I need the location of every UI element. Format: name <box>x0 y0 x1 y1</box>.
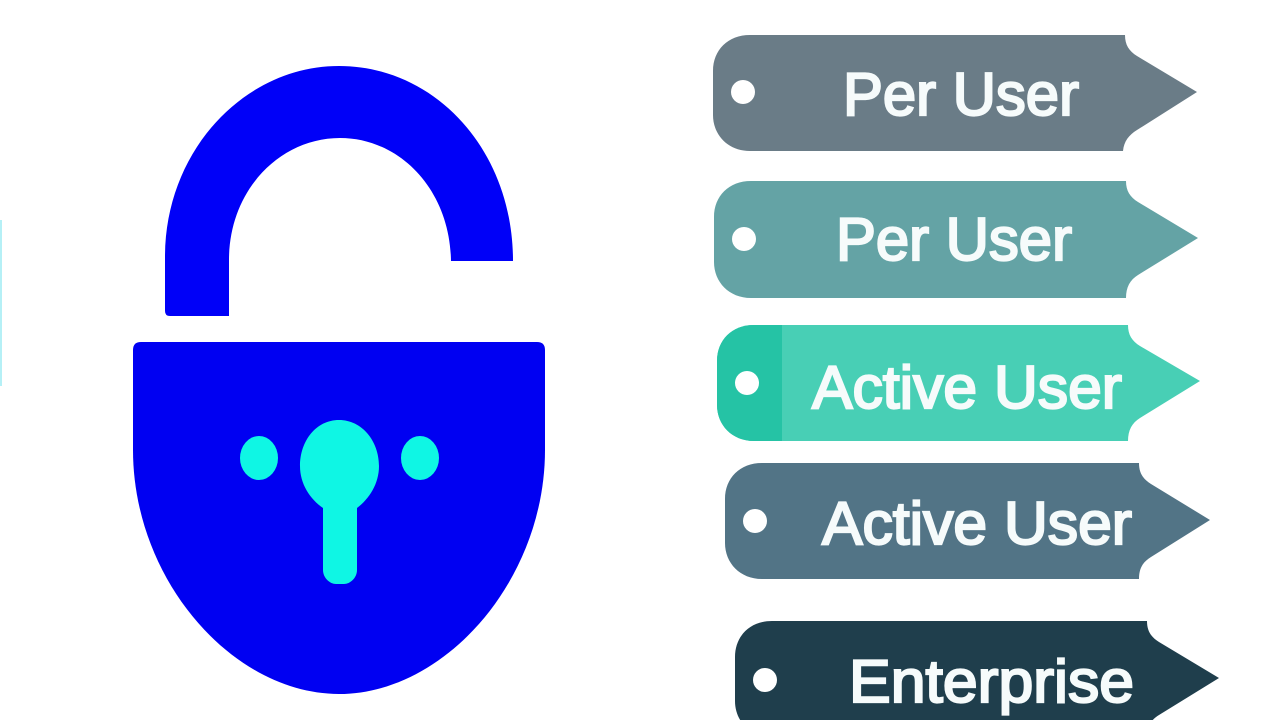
keyhole <box>300 420 379 584</box>
tag: Enterprise (dark): Enterprise <box>849 648 1134 715</box>
padlock body <box>133 342 545 694</box>
padlock shackle <box>165 66 513 316</box>
right dot <box>401 436 439 480</box>
tag: Per User (grey) <box>713 35 1197 151</box>
tag: Active User (slate): Active User <box>822 490 1132 557</box>
tag: Per User (teal grey) <box>714 181 1198 298</box>
tag: Active User (green teal): Active User <box>812 354 1122 421</box>
left dot <box>240 436 278 480</box>
tag: Per User (teal grey): Per User <box>836 206 1072 273</box>
tag: Enterprise (dark) <box>735 621 1219 720</box>
icon: open padlock <box>133 66 545 694</box>
tag: Active User (green teal) <box>717 325 1200 441</box>
darker tab band <box>717 325 782 441</box>
tag: Per User (grey): Per User <box>843 61 1079 128</box>
tag: Active User (slate) <box>725 463 1210 579</box>
